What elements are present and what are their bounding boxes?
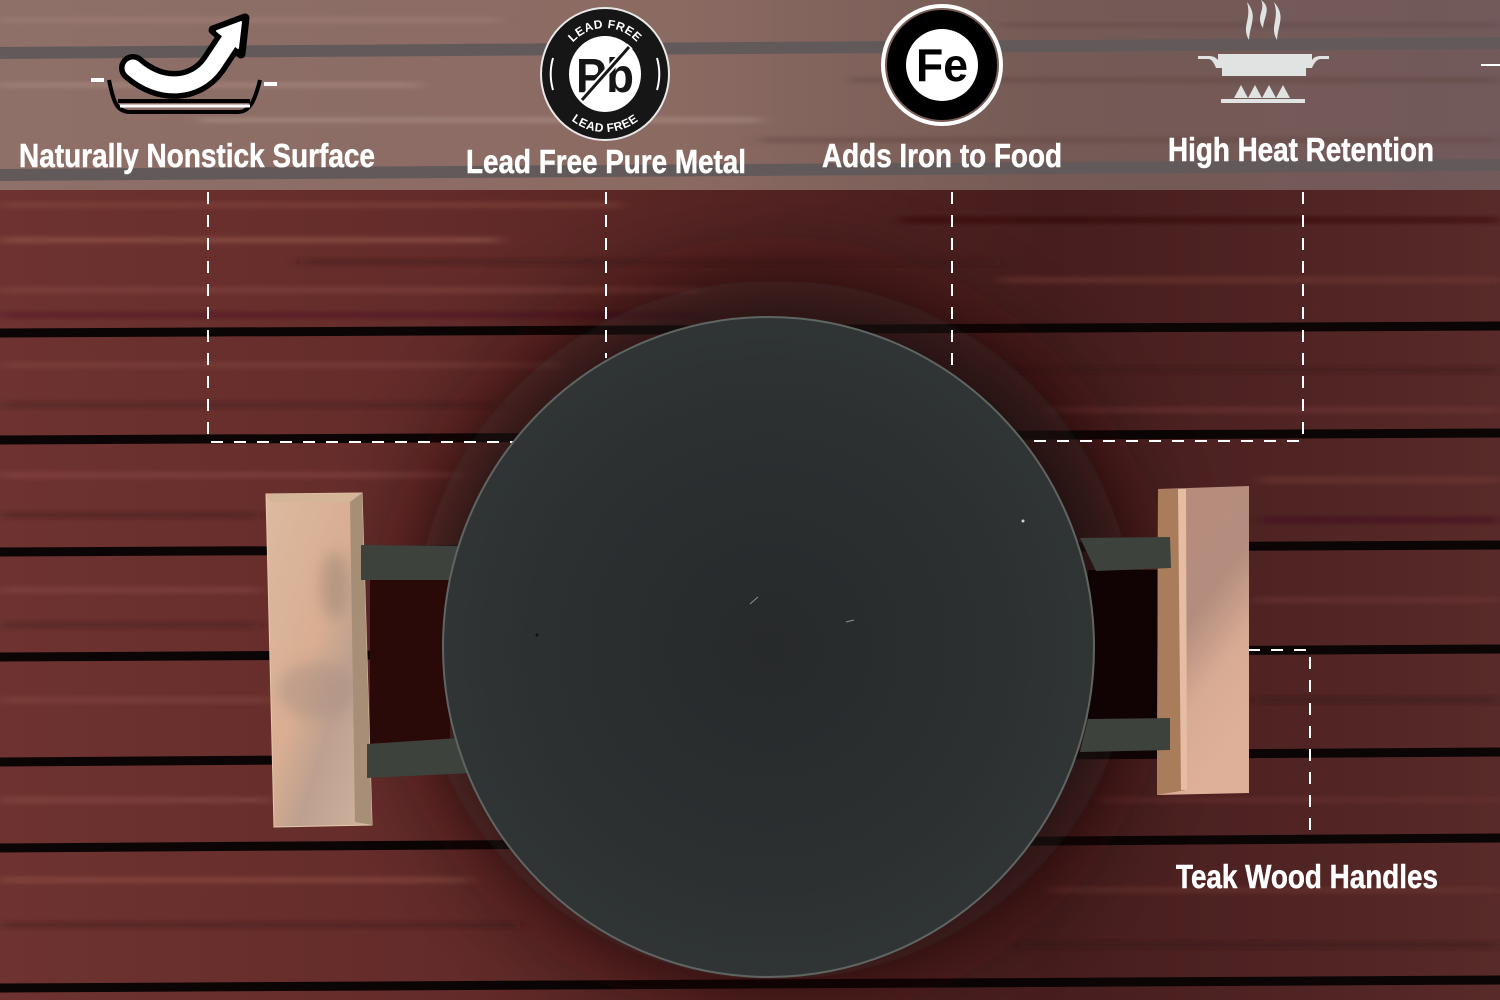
right handle (1080, 486, 1249, 795)
icon: iron Fe (881, 4, 1003, 126)
icon: nonstick surface (91, 18, 277, 112)
dashed leader lines (208, 192, 1310, 838)
icon: lead free badge: Pb (576, 50, 634, 103)
left handle (266, 493, 471, 827)
label: high heat retention: High Heat Retention (1168, 131, 1434, 168)
handle straps (361, 545, 462, 580)
icon: pot on burner (1198, 0, 1329, 103)
label: adds iron to food: Adds Iron to Food (822, 137, 1062, 174)
icon: lead free badge (540, 7, 670, 141)
icon: lead free badge: LEAD FREE (568, 20, 642, 42)
label: lead free pure metal: Lead Free Pure Metal (466, 143, 746, 180)
icon: iron Fe: Fe (916, 39, 968, 91)
iron pan (443, 317, 1094, 977)
top translucent banner (0, 0, 1500, 190)
plank gaps (0, 326, 1500, 988)
handle straps (1080, 537, 1171, 571)
pan shadow (415, 280, 1135, 980)
label: teak wood handles: Teak Wood Handles (1176, 858, 1438, 895)
label: naturally nonstick surface: Naturally Nonstick Surface (19, 137, 375, 174)
icon: lead free badge: LEAD FREE (572, 114, 638, 132)
short marker line (1481, 64, 1500, 66)
